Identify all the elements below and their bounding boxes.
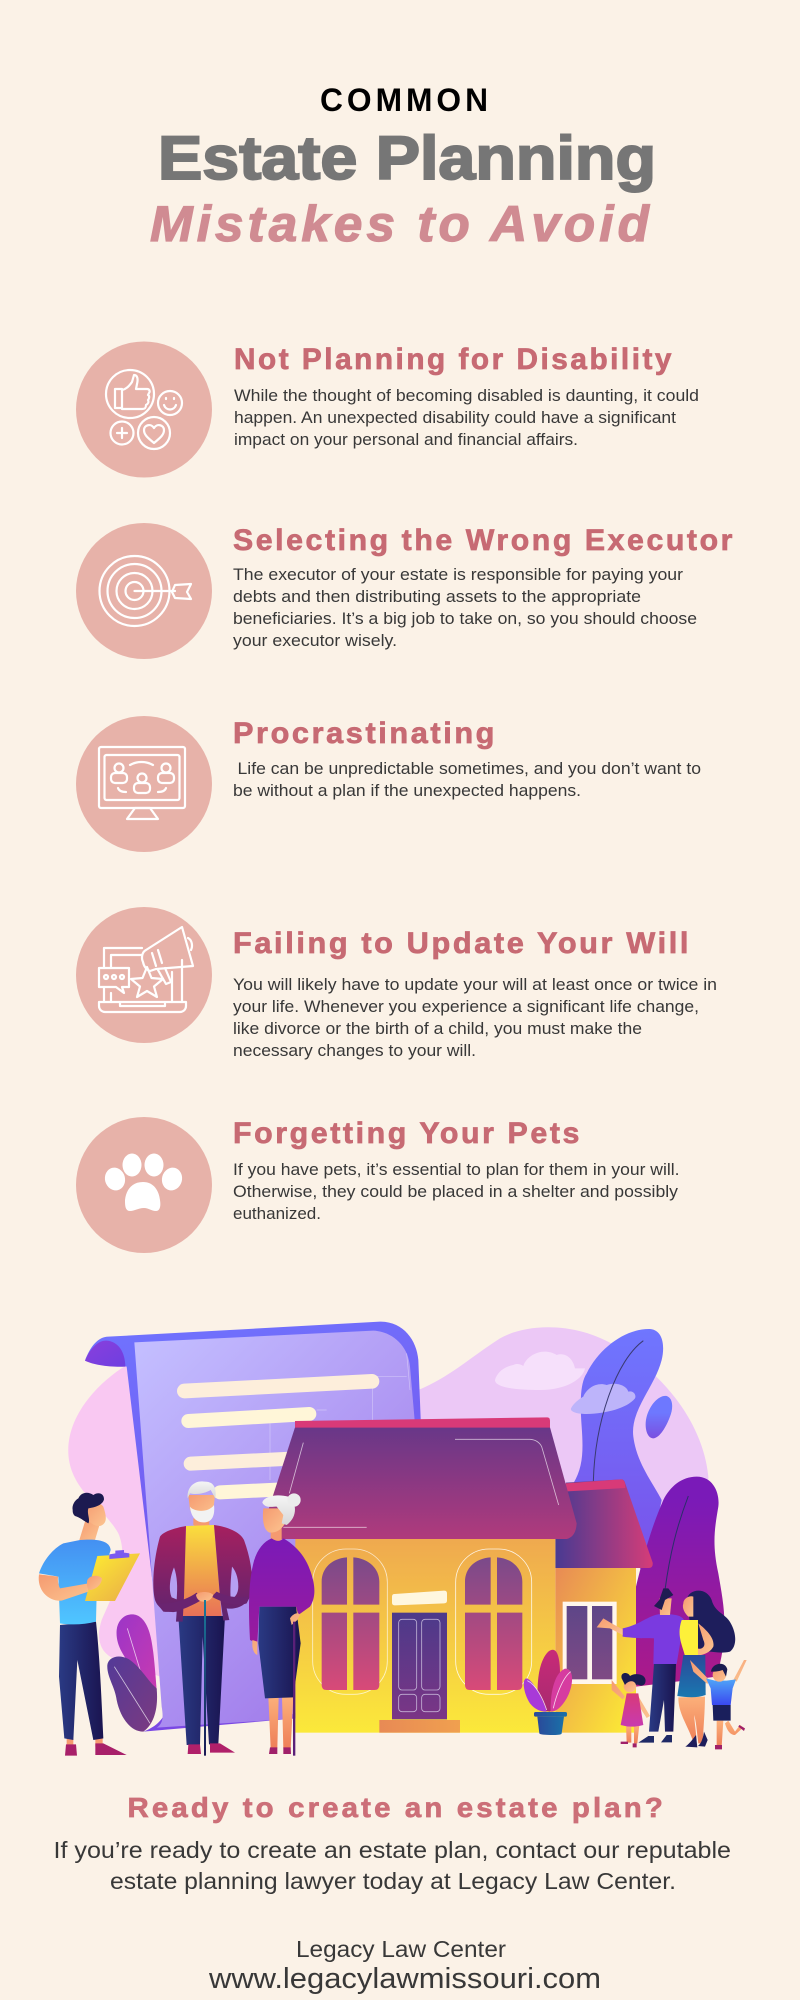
text block: be without a plan if the unexpected happens. (233, 781, 581, 800)
text block: euthanized. (233, 1204, 321, 1223)
title: mistakes to avoid: Mistakes to Avoid (150, 196, 653, 252)
blue plant (573, 1329, 663, 1577)
text block (233, 759, 701, 800)
text block (233, 565, 697, 650)
potted plant (524, 1650, 572, 1735)
heading: Failing to Update Your Will (233, 927, 691, 960)
text block: your executor wisely. (233, 631, 397, 650)
text block: Life can be unpredictable sometimes, and you don’t want to (238, 759, 701, 778)
text block: You will likely have to update your will at least once or twice in (233, 975, 717, 994)
icon: target and arrow (76, 523, 212, 659)
right window (456, 1549, 532, 1694)
title: common: COMMON (320, 82, 492, 118)
text block: The executor of your estate is responsible for paying your (233, 565, 683, 584)
old man with cane (153, 1481, 252, 1756)
title block (150, 82, 656, 252)
family group (597, 1588, 747, 1749)
cta text: If you’re ready to create an estate plan, contact our reputable (54, 1837, 731, 1863)
icon: thumbs up and smileys (76, 342, 212, 478)
left window (313, 1549, 387, 1694)
house (268, 1417, 653, 1733)
illustration: family, will and house (39, 1322, 747, 1756)
text block: beneficiaries. It’s a big job to take on, so you should choose (233, 609, 697, 628)
heading: Not Planning for Disability (234, 343, 674, 376)
text block: necessary changes to your will. (233, 1041, 476, 1060)
text block: impact on your personal and financial affairs. (234, 430, 578, 449)
icon: paw print (76, 1117, 212, 1253)
mother (677, 1591, 735, 1747)
plant stem (593, 1341, 643, 1482)
purple tree (636, 1477, 724, 1687)
icon: laptop and megaphone (76, 907, 212, 1043)
heading: Forgetting Your Pets (233, 1117, 582, 1150)
old woman with cane (249, 1493, 314, 1756)
footer contact (208, 1936, 601, 1995)
annex window (563, 1602, 617, 1684)
cta heading: Ready to create an estate plan? (128, 1792, 666, 1823)
text block: happen. An unexpected disability could have a significant (234, 408, 676, 427)
text block: Otherwise, they could be placed in a shelter and possibly (233, 1182, 679, 1201)
panel: failing to update your will (76, 907, 717, 1060)
call to action (54, 1792, 731, 1894)
cta text: estate planning lawyer today at Legacy Law Center. (110, 1868, 676, 1894)
text block: While the thought of becoming disabled is daunting, it could (234, 386, 699, 405)
tree stem (665, 1496, 688, 1590)
text block (233, 975, 717, 1060)
door (392, 1613, 447, 1719)
heading: Procrastinating (233, 717, 497, 750)
leaves left (107, 1614, 157, 1732)
cloud (495, 1352, 585, 1390)
father (597, 1588, 684, 1743)
cloud on plant (571, 1384, 635, 1414)
text block: debts and then distributing assets to the appropriate (233, 587, 641, 606)
icon: monitor with people (76, 716, 212, 852)
young man with clipboard (39, 1493, 140, 1756)
cta text (54, 1837, 731, 1894)
pink blob left (68, 1365, 160, 1677)
heading: Selecting the Wrong Executor (233, 524, 735, 557)
text block (234, 386, 699, 449)
text block: like divorce or the birth of a child, you must make the (233, 1019, 642, 1038)
boy (690, 1660, 747, 1749)
text block: your life. Whenever you experience a significant life change, (233, 997, 699, 1016)
text block: If you have pets, it’s essential to plan for them in your will. (233, 1160, 680, 1179)
panel: not planning for disability (76, 342, 699, 478)
girl (612, 1673, 650, 1747)
firm name: Legacy Law Center (296, 1936, 506, 1962)
panel: forgetting your pets (76, 1117, 680, 1253)
title: estate planning: Estate Planning (158, 124, 656, 192)
website: www.legacylawmissouri.com (208, 1963, 601, 1995)
panel: selecting the wrong executor (76, 523, 735, 659)
lilac blob right (418, 1327, 708, 1543)
panel: procrastinating (76, 716, 701, 852)
text block (233, 1160, 680, 1223)
small blue leaf (646, 1396, 672, 1438)
scroll document (85, 1322, 422, 1732)
